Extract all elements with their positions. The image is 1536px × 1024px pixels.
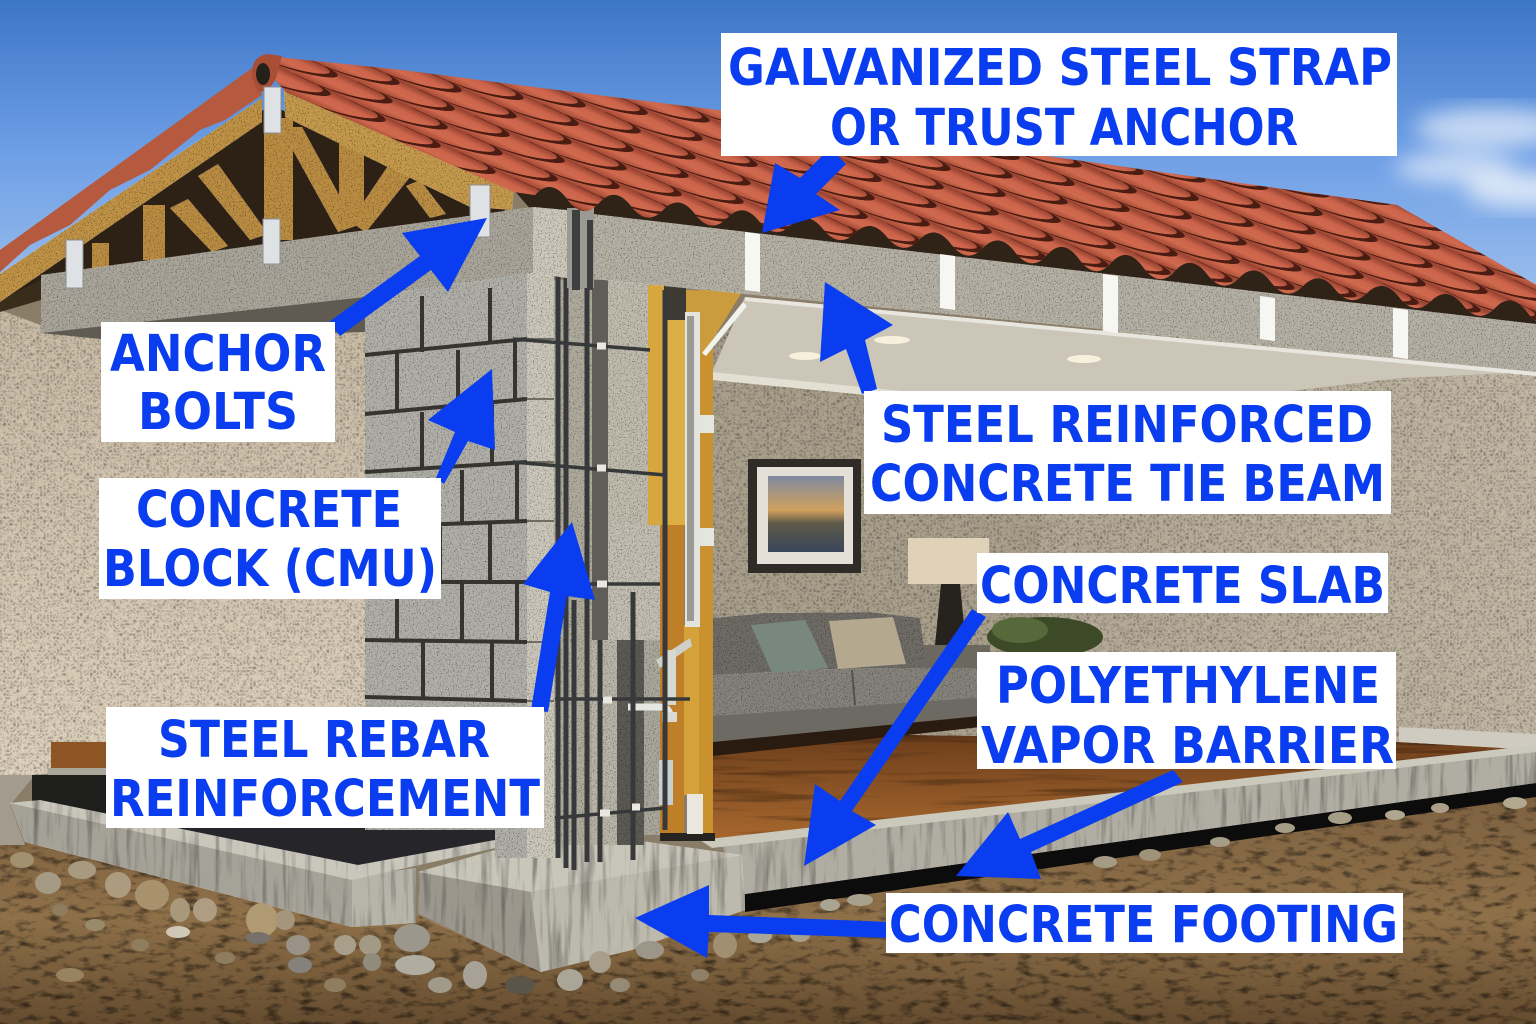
label: anchor bolts: ANCHOR — [110, 325, 326, 384]
ceiling downlights — [789, 336, 1101, 363]
label: polyethylene vapor barrier: VAPOR BARRIER — [981, 717, 1394, 776]
label: steel reinforced concrete tie beam: STEEL REINFORCED — [881, 396, 1373, 455]
framed wall picture — [748, 459, 861, 573]
galvanized straps on tie beam — [745, 232, 1408, 359]
label: concrete footing: CONCRETE FOOTING — [889, 896, 1398, 955]
roof tiles — [0, 54, 1536, 324]
eave shadow behind tiles — [505, 180, 1536, 330]
gable truss — [0, 88, 514, 312]
arrow: concrete slab — [804, 609, 986, 866]
label: concrete slab: CONCRETE SLAB — [980, 557, 1385, 616]
label: steel rebar reinforcement — [106, 707, 544, 829]
arrow: anchor bolts — [329, 218, 487, 336]
main footing block — [418, 837, 745, 972]
arrow: concrete footing — [635, 885, 890, 958]
arrow: galvanized steel strap — [762, 148, 846, 233]
arrow: concrete block — [428, 369, 495, 484]
block corner and grout column — [527, 270, 662, 858]
potted plant — [987, 617, 1103, 657]
vapor barrier black strip — [745, 783, 1536, 912]
concrete tie beam — [41, 207, 1536, 376]
gable edge tiles — [0, 68, 262, 272]
strip footing — [10, 800, 495, 927]
rebar ties — [597, 346, 640, 813]
label: polyethylene vapor barrier: POLYETHYLENE — [996, 657, 1380, 716]
conduit and plumbing pipes — [628, 302, 747, 834]
arrow: steel rebar — [523, 522, 595, 712]
label: steel rebar reinforcement: STEEL REBAR — [158, 711, 490, 770]
label: galvanized steel strap: OR TRUST ANCHOR — [830, 99, 1298, 158]
ridge cap — [252, 54, 282, 92]
galvanized straps on gable — [66, 87, 490, 288]
label: anchor bolts — [101, 322, 335, 442]
ceiling and interior back wall — [712, 297, 1536, 760]
arrow: tie beam — [820, 282, 893, 394]
label: galvanized steel strap: GALVANIZED STEEL STRAP — [728, 39, 1392, 98]
label: concrete block: BLOCK (CMU) — [103, 540, 437, 599]
label: galvanized steel strap — [721, 33, 1397, 158]
sofa pillows — [751, 617, 906, 673]
sofa — [713, 612, 990, 756]
gravel stones — [10, 797, 1527, 994]
rough plinth at far left — [0, 775, 35, 845]
mortar joints — [365, 288, 527, 701]
ground — [0, 790, 1536, 1024]
label: steel rebar reinforcement: REINFORCEMENT — [110, 770, 540, 829]
clouds — [1395, 108, 1536, 208]
floor lamp — [908, 538, 989, 645]
left stucco wall — [0, 300, 370, 775]
baseboard at far right — [1399, 727, 1536, 750]
wood floor — [711, 732, 1536, 840]
steel rebar — [513, 208, 690, 870]
wood framing and sheathing — [648, 285, 742, 841]
label: concrete block: CONCRETE — [136, 481, 402, 540]
sky background — [0, 0, 1536, 340]
label: steel reinforced concrete tie beam — [864, 391, 1391, 514]
left wood deck and membrane — [32, 742, 500, 868]
label: steel reinforced concrete tie beam: CONCRETE TIE BEAM — [870, 455, 1385, 514]
label: anchor bolts: BOLTS — [138, 383, 298, 442]
arrow: vapor barrier — [956, 770, 1183, 879]
label: concrete block — [99, 478, 441, 599]
label: polyethylene vapor barrier — [977, 652, 1396, 776]
concrete slab edge — [700, 745, 1536, 894]
concrete block wall — [365, 265, 527, 858]
